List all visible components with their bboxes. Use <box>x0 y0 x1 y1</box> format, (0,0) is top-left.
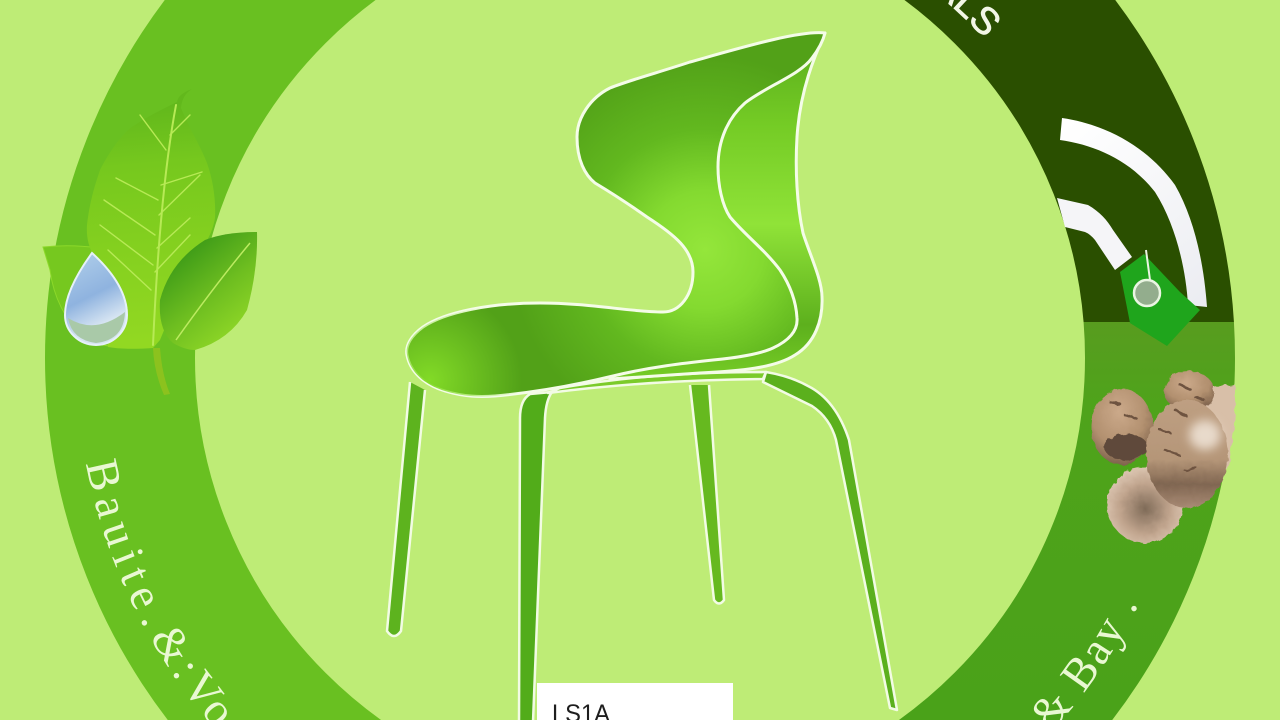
chair leg: front center <box>519 392 552 720</box>
left mushroom <box>1091 389 1153 465</box>
left mushroom shadow <box>1104 434 1148 460</box>
chair leg: front right <box>763 372 897 710</box>
tag ring <box>1134 280 1160 306</box>
mushroom bodies <box>1091 371 1235 543</box>
water drop <box>65 253 127 345</box>
green tag <box>1120 254 1200 346</box>
main leaf <box>87 89 215 349</box>
tag string <box>1146 250 1150 280</box>
chair illustration <box>387 33 897 720</box>
mushroom texture <box>1110 385 1204 470</box>
water drop lower pool <box>68 312 125 343</box>
small left leaf <box>43 246 140 347</box>
label background <box>537 683 733 720</box>
chair leg: rear middle <box>690 385 724 604</box>
center mushroom <box>1146 400 1228 508</box>
ring segment: left <box>45 0 381 720</box>
chair leg: rear left <box>387 382 425 636</box>
icon: leaves and water drop <box>43 89 257 395</box>
right leaf vein <box>176 243 250 340</box>
icon: white tubes and green tag <box>1057 118 1207 346</box>
chair seat and inner back <box>407 33 825 396</box>
ring segment: lower right <box>899 322 1235 720</box>
right leaf <box>160 232 257 350</box>
main leaf veins <box>100 105 202 345</box>
light cap right <box>1185 385 1235 470</box>
short tube <box>1057 198 1132 270</box>
center mushroom highlight <box>1189 420 1221 450</box>
stem <box>153 348 170 395</box>
chair seat highlight <box>407 303 540 396</box>
under-seat rail <box>548 372 766 393</box>
label box <box>537 683 733 720</box>
long tube <box>1060 118 1207 307</box>
lower mushroom <box>1107 467 1183 543</box>
chair back outer shell <box>610 33 825 379</box>
ring segment: upper right dark <box>904 0 1234 322</box>
top mushroom <box>1164 371 1214 411</box>
icon: mushroom cluster <box>1091 371 1235 543</box>
